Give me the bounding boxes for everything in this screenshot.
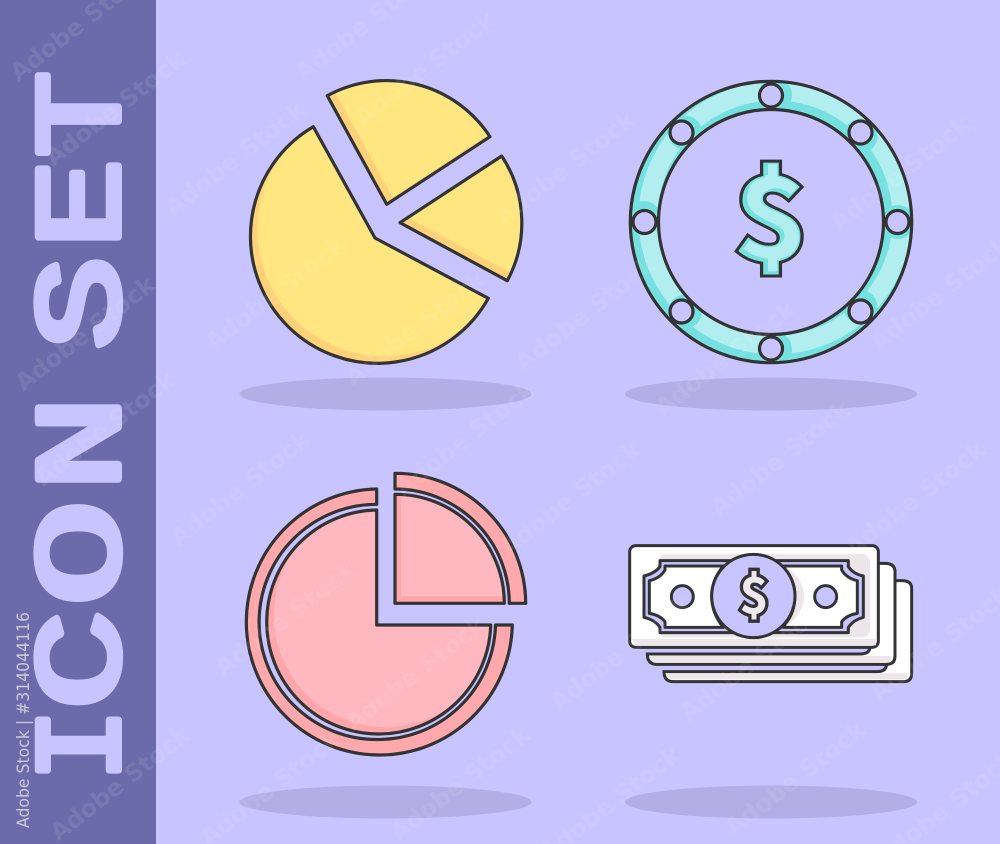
watermark pattern: Adobe Stock bbox=[340, 610, 491, 737]
watermark pattern: Adobe Stock bbox=[825, 110, 976, 237]
center medallion bbox=[712, 554, 795, 638]
watermark pattern: Adobe Stock bbox=[675, 600, 826, 727]
watermark pattern: Adobe Stock bbox=[385, 720, 536, 844]
icon: banknote stack bbox=[630, 546, 912, 682]
right slice bbox=[400, 148, 525, 281]
sidebar title: ICON SET: T bbox=[18, 71, 156, 157]
sidebar title: ICON SET: S bbox=[18, 256, 156, 350]
watermark pattern: Adobe Stock bbox=[510, 250, 661, 377]
watermark pattern: Adobe Stock bbox=[545, 590, 696, 717]
watermark pattern: Adobe Stock bbox=[840, 435, 991, 562]
coin dollar sign: $ bbox=[735, 129, 807, 291]
sidebar title: ICON SET: O bbox=[18, 500, 156, 606]
watermark pattern: Adobe Stock bbox=[650, 295, 801, 422]
icon shadow: yellow pie bbox=[240, 378, 532, 410]
watermark pattern: Adobe Stock bbox=[10, 270, 161, 397]
icon: yellow pie chart bbox=[250, 74, 525, 363]
right eyelet bbox=[815, 586, 837, 608]
left panel bbox=[649, 566, 723, 627]
watermark pattern: Adobe Stock bbox=[490, 105, 641, 232]
sidebar title: ICON SET bbox=[17, 71, 156, 782]
large pink outer arc bbox=[246, 489, 512, 755]
large pink slice bbox=[267, 503, 498, 734]
quarter pink slice bbox=[395, 487, 510, 603]
left eyelet bbox=[671, 586, 693, 608]
quarter pink outer arc bbox=[395, 473, 526, 603]
sidebar title: ICON SET: I bbox=[18, 708, 156, 782]
watermark pattern: Adobe Stock bbox=[200, 230, 351, 357]
coin dollar sign: $ bbox=[735, 129, 807, 291]
watermark pattern: Adobe Stock bbox=[350, 5, 501, 132]
middle note bbox=[647, 563, 895, 664]
watermark pattern: Adobe Stock bbox=[165, 425, 316, 552]
stock id text: Adobe Stock | #314044116 bbox=[14, 612, 34, 828]
icon shadow: banknotes bbox=[625, 786, 917, 818]
front note bbox=[630, 546, 878, 647]
watermark pattern: Adobe Stock bbox=[30, 365, 181, 492]
icon: dollar coin bbox=[627, 78, 915, 366]
note dollar sign: $ bbox=[739, 556, 769, 628]
watermark pattern: Adobe Stock bbox=[40, 45, 191, 172]
large slice bbox=[250, 120, 495, 363]
watermark pattern: Adobe Stock bbox=[340, 265, 491, 392]
sidebar title: ICON SET: E bbox=[17, 159, 155, 248]
watermark pattern: Adobe Stock bbox=[45, 720, 196, 844]
icon shadow: coin bbox=[625, 378, 917, 410]
sidebar title: ICON SET: N bbox=[18, 396, 156, 491]
coin ring bbox=[627, 78, 915, 366]
watermark pattern: Adobe Stock bbox=[720, 715, 871, 842]
watermark pattern: Adobe Stock bbox=[390, 375, 541, 502]
watermark pattern: Adobe Stock bbox=[495, 435, 646, 562]
coin dollar sign: $ bbox=[738, 127, 811, 289]
back note bbox=[664, 581, 912, 682]
icon: pink pie chart bbox=[246, 473, 526, 755]
sidebar title: ICON SET: C bbox=[17, 610, 155, 710]
watermark pattern: Adobe Stock bbox=[210, 555, 361, 682]
sidebar panel bbox=[0, 0, 156, 844]
note frame bbox=[644, 561, 863, 633]
icon shadow: pink pie bbox=[240, 786, 532, 818]
top slice bbox=[327, 74, 496, 204]
coin rivets bbox=[633, 84, 909, 360]
watermark pattern: Adobe Stock bbox=[705, 395, 856, 522]
coin dollar sign bbox=[734, 160, 804, 278]
right panel bbox=[783, 566, 857, 627]
watermark pattern: Adobe Stock bbox=[160, 95, 311, 222]
